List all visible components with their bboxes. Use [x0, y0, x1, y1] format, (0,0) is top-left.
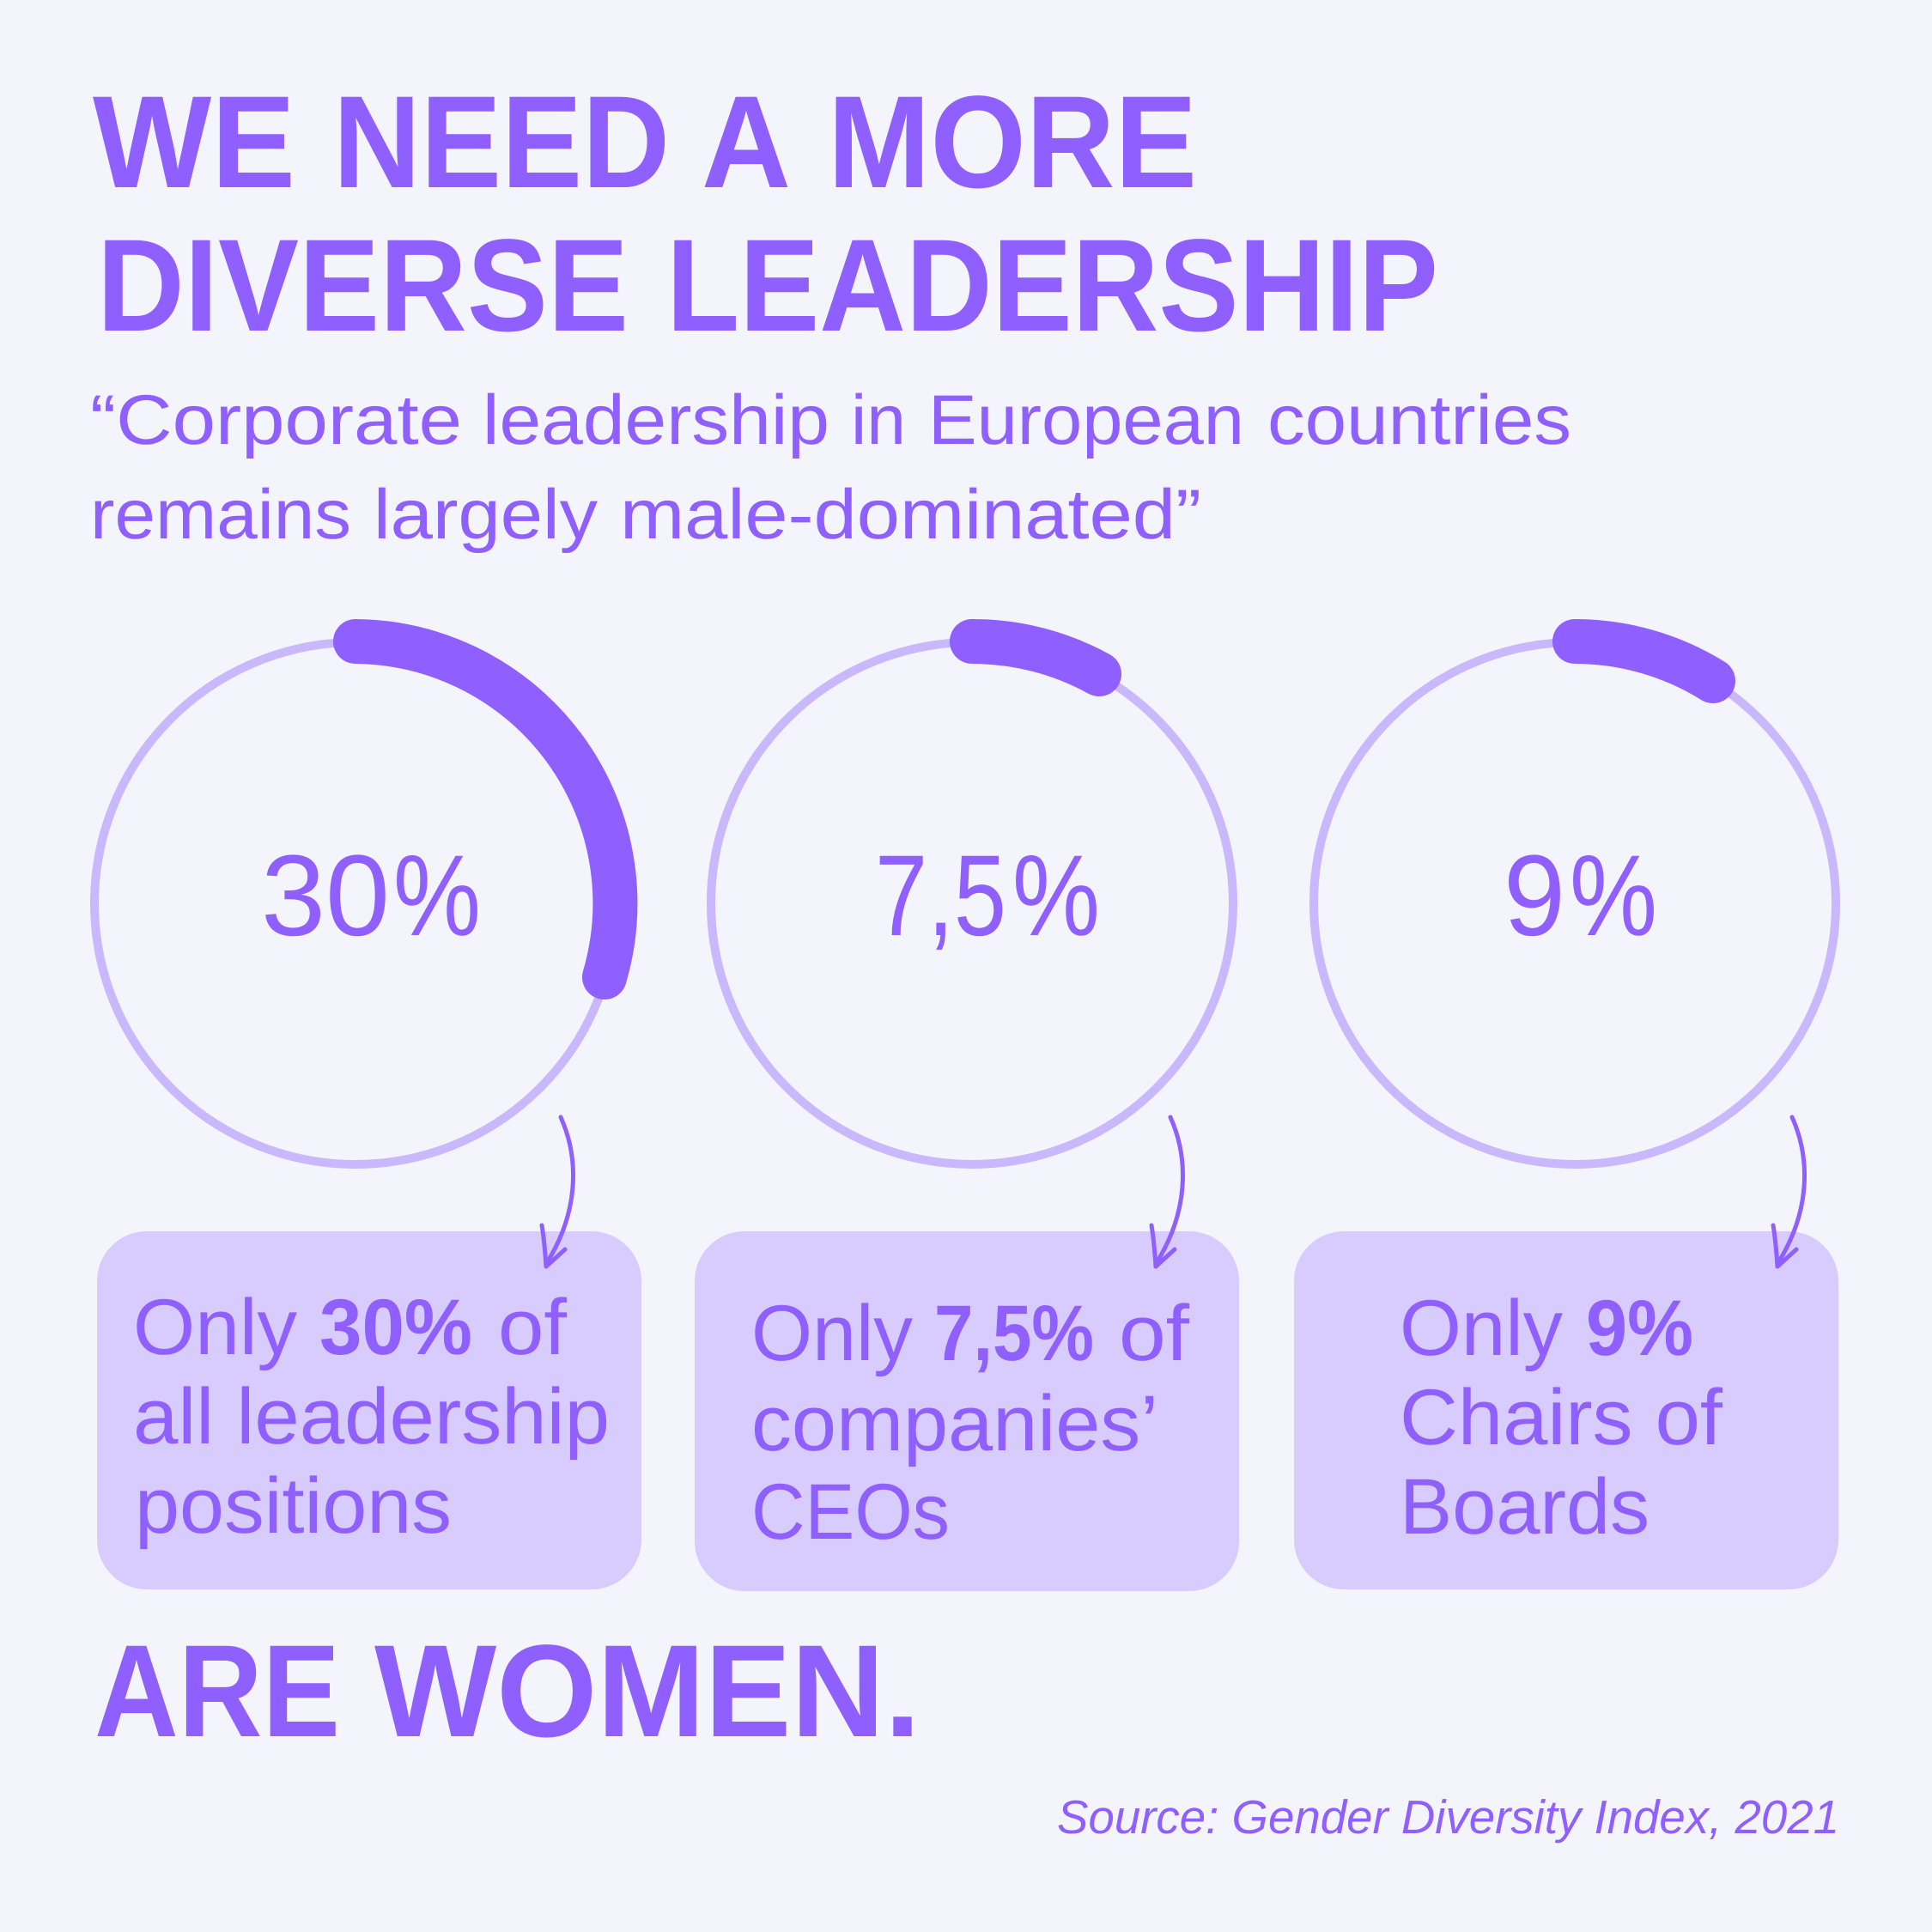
callout: 30% of leadership positions: Only: [133, 1284, 297, 1371]
subtitle quote: in: [851, 381, 906, 459]
callout: 7,5% of CEOs: companies’: [751, 1380, 1158, 1467]
conclusion heading: [94, 1618, 920, 1765]
subtitle quote: leadership: [483, 381, 829, 459]
callout: 30% of leadership positions: [97, 1231, 641, 1589]
panel: 30% donut: %: [393, 832, 481, 960]
title: NEED: [333, 69, 670, 216]
subtitle quote: male-dominated”: [620, 476, 1201, 554]
panel: 30% donut: 30: [261, 832, 390, 960]
panel: 9% donut: 9: [1504, 832, 1565, 960]
arrow: 30% donut to callout: [542, 1117, 574, 1267]
subtitle quote: largely: [374, 476, 598, 554]
arrow: 7,5% donut to callout: [1151, 1117, 1183, 1267]
source note: Source: Gender Diversity Index, 2021: [1057, 1790, 1839, 1844]
panel: 7,5% donut: [711, 641, 1233, 1164]
callout: 7,5% of CEOs: of: [1119, 1290, 1189, 1377]
title: DIVERSE: [97, 212, 629, 359]
callout: 7,5% of CEOs: [695, 1231, 1239, 1591]
callout: 30% of leadership positions: positions: [135, 1462, 452, 1550]
callout: 9% Chairs of Boards: Chairs of: [1400, 1374, 1722, 1461]
conclusion heading: WOMEN.: [374, 1618, 920, 1765]
arrow: 9% donut to callout: [1773, 1117, 1805, 1267]
conclusion heading: ARE: [94, 1618, 340, 1765]
callout: 30% of leadership positions: of: [498, 1284, 567, 1371]
subtitle quote: remains: [90, 476, 351, 554]
title: A: [702, 69, 791, 216]
callout: 9% Chairs of Boards: Only: [1400, 1285, 1563, 1372]
callout: 30% of leadership positions: all leadership: [133, 1373, 610, 1461]
panel: 7,5% donut: %: [1012, 832, 1100, 960]
panel: 9% donut: [1314, 641, 1836, 1164]
title: MORE: [828, 69, 1197, 216]
title: LEADERSHIP: [666, 212, 1438, 359]
callout: 7,5% of CEOs: Only: [751, 1290, 913, 1377]
subtitle quote: countries: [1267, 381, 1571, 459]
callout: 9% Chairs of Boards: [1294, 1231, 1838, 1589]
subtitle quote: European: [928, 381, 1244, 459]
subtitle quote: “Corporate: [90, 381, 462, 459]
panel: 7,5% donut: 7,5: [875, 832, 1006, 960]
callout: 9% Chairs of Boards: Boards: [1400, 1463, 1649, 1551]
callout: 7,5% of CEOs: CEOs: [751, 1468, 950, 1556]
panel: 30% donut: [94, 641, 617, 1164]
title: WE: [93, 69, 295, 216]
panel: 9% donut: %: [1570, 832, 1657, 960]
callout: 9% Chairs of Boards: 9%: [1586, 1285, 1693, 1372]
subtitle quote: [90, 381, 1571, 554]
title: [93, 69, 1438, 359]
callout: 30% of leadership positions: 30%: [319, 1284, 472, 1371]
callout: 7,5% of CEOs: 7,5%: [934, 1290, 1094, 1377]
